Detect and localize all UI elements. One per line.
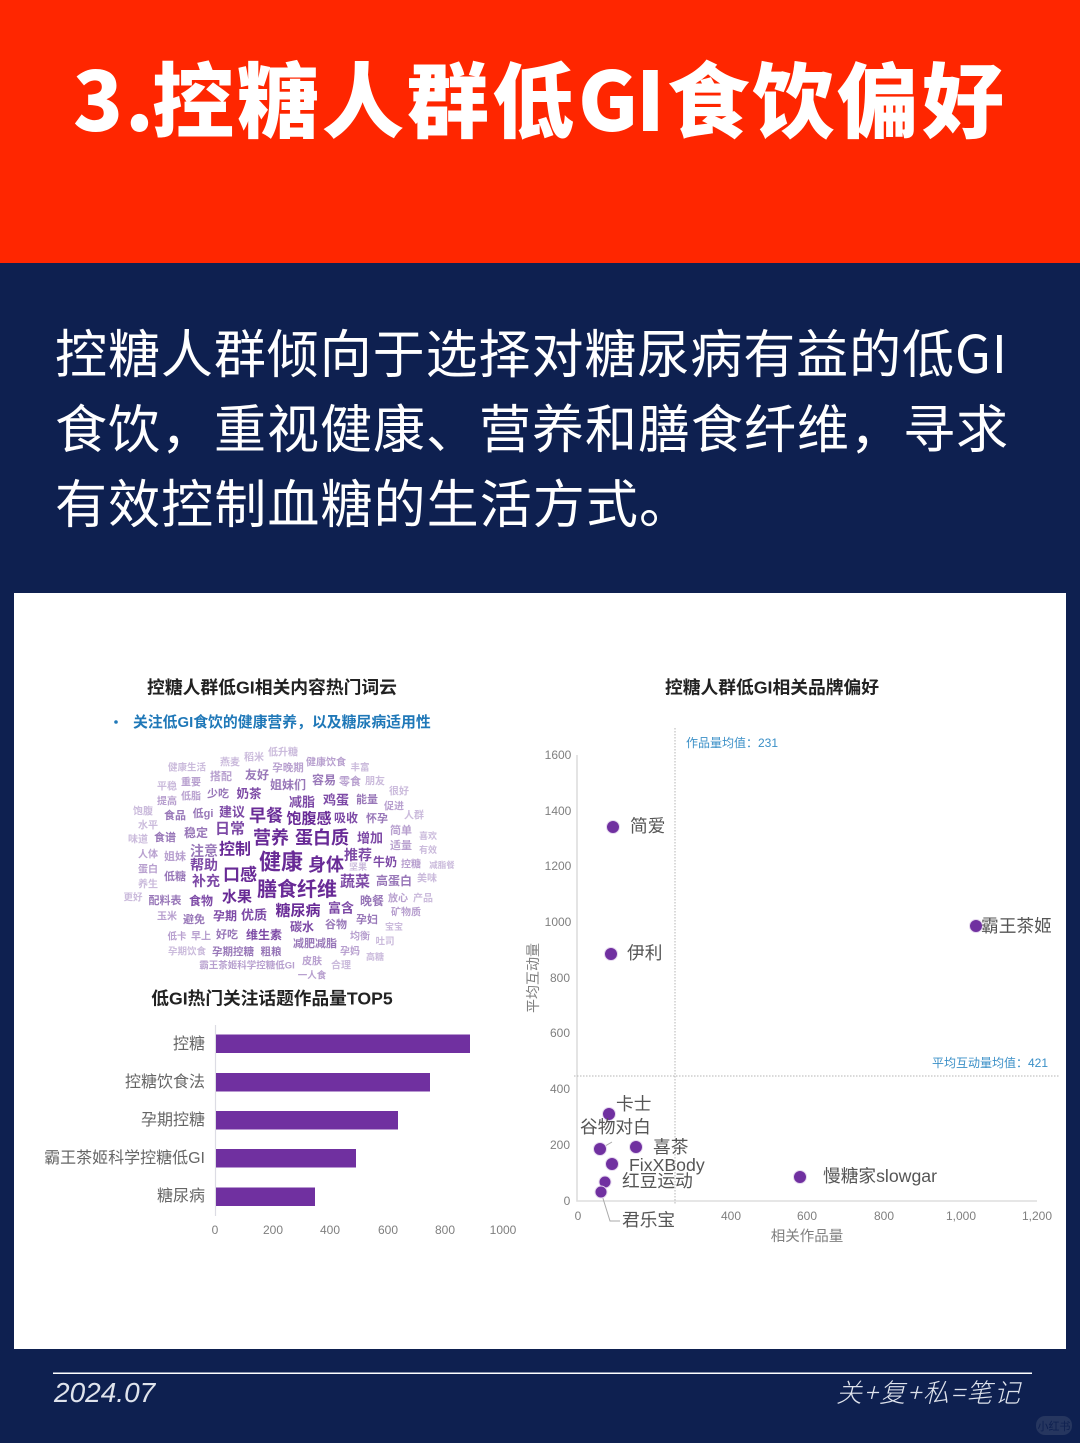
word cloud: 合理 [331, 958, 351, 972]
point labels: 君乐宝 [622, 1210, 675, 1230]
category labels: 控糖饮食法 [125, 1073, 205, 1091]
bars [216, 1034, 470, 1206]
category labels: 孕期控糖 [141, 1111, 205, 1129]
point labels: 喜茶 [653, 1137, 689, 1157]
heading: word cloud: 控糖人群低GI相关内容热门词云 [147, 676, 397, 698]
point labels: 简爱 [630, 816, 665, 836]
word cloud: 增加 [357, 830, 383, 846]
y axis labels [545, 748, 572, 1208]
word cloud: 控制 [219, 840, 251, 858]
word cloud: 提高 [157, 794, 177, 808]
word cloud: 推荐 [344, 847, 372, 863]
word cloud: 姐妹 [164, 849, 186, 863]
heading: scatter chart: 控糖人群低GI相关品牌偏好 [665, 676, 879, 698]
word cloud: 怀孕 [366, 811, 388, 825]
axis title: y: 平均互动量 [525, 943, 541, 1013]
word cloud: 食品 [164, 808, 186, 822]
intro text block [55, 313, 1008, 538]
title: 3.控糖人群低GI食饮偏好 [73, 36, 1004, 155]
bar chart [44, 1025, 517, 1237]
y axis labels: 1000 [545, 915, 572, 929]
word cloud: 日常 [215, 820, 245, 838]
word cloud: 配料表 [148, 893, 182, 907]
value axis: 0 [212, 1223, 219, 1237]
word cloud: 建议 [219, 804, 245, 820]
x axis labels: 400 [721, 1209, 741, 1223]
header band [0, 0, 1080, 263]
word cloud: 早餐 [249, 806, 283, 826]
word cloud: 喜欢 [419, 830, 437, 841]
point labels: FixXBody [629, 1155, 705, 1175]
word cloud: 低卡 [167, 930, 187, 942]
mean label: works: 作品量均值：231 [686, 735, 778, 750]
word cloud: 零食 [339, 774, 361, 788]
word cloud: 水果 [222, 888, 252, 906]
word cloud: 稻米 [244, 750, 264, 764]
word cloud: 霸王茶姬科学控糖低GI [199, 960, 295, 972]
word cloud: 促进 [384, 800, 404, 812]
word cloud: 营养 [253, 827, 289, 848]
word cloud: 放心 [388, 892, 408, 904]
data points [594, 820, 982, 1198]
word cloud: 有效 [419, 844, 437, 855]
word cloud: 避免 [183, 912, 205, 926]
word cloud: 燕麦 [220, 756, 240, 768]
word cloud: 朋友 [365, 774, 385, 788]
word cloud: 膳食纤维 [257, 877, 337, 901]
word cloud: 鸡蛋 [323, 792, 349, 808]
word cloud: 宝宝 [385, 921, 403, 932]
word cloud: 富含 [328, 900, 354, 916]
y axis labels: 1600 [545, 748, 572, 762]
word cloud: 减脂 [289, 794, 315, 810]
category labels: 霸王茶姬科学控糖低GI [44, 1149, 205, 1167]
axis title: x: 相关作品量 [771, 1228, 843, 1245]
mean label: engagement: 平均互动量均值：421 [932, 1055, 1048, 1070]
word cloud: 玉米 [157, 910, 177, 922]
word cloud: 孕晚期 [272, 761, 304, 774]
word cloud: 控糖 [401, 858, 421, 870]
y axis labels: 400 [550, 1082, 570, 1096]
axes [577, 755, 1037, 1201]
y axis labels: 800 [550, 971, 570, 985]
y axis labels: 0 [564, 1194, 571, 1208]
heading: bar chart: 低GI热门关注话题作品量TOP5 [151, 988, 393, 1008]
word cloud: 糖尿病 [275, 902, 321, 920]
word cloud: 蛋白质 [295, 827, 349, 848]
word cloud: 饱腹 [133, 804, 153, 818]
word cloud: 碳水 [290, 919, 314, 934]
point labels [580, 816, 1052, 1230]
point labels: 红豆运动 [622, 1171, 693, 1191]
word cloud [123, 746, 455, 982]
date: 2024.07 [53, 1377, 157, 1408]
word cloud: 姐妹们 [270, 777, 306, 792]
word cloud: 健康 [259, 850, 303, 874]
category labels: 控糖 [173, 1035, 205, 1053]
word cloud: 食谱 [154, 830, 176, 844]
call to action: 关+复+私=笔记 [836, 1373, 1022, 1410]
word cloud: 低糖 [164, 869, 186, 883]
word cloud: 蔬菜 [340, 874, 370, 890]
word cloud: 蛋白 [138, 862, 158, 876]
word cloud: 孕期饮食 [168, 946, 206, 958]
value axis: 1000 [490, 1223, 517, 1237]
word cloud: 产品 [413, 892, 433, 904]
y axis labels: 200 [550, 1138, 570, 1152]
word cloud: 早上 [191, 930, 211, 942]
category labels: 糖尿病 [157, 1187, 205, 1205]
word cloud: 健康饮食 [306, 756, 346, 768]
word cloud: 低升糖 [268, 746, 298, 758]
x axis labels: 800 [874, 1209, 894, 1223]
word cloud: 少吃 [207, 786, 229, 800]
word cloud: 容易 [312, 772, 336, 787]
x axis labels: 1,000 [946, 1209, 976, 1223]
word cloud: 更好 [123, 892, 143, 904]
word cloud: 吐司 [375, 936, 395, 948]
word cloud: 孕期控糖 [212, 945, 254, 958]
callout: word cloud insight: 关注低GI食饮的健康营养，以及糖尿病适用性 [133, 713, 431, 731]
x axis labels: 600 [797, 1209, 817, 1223]
point labels: 霸王茶姬 [981, 916, 1052, 936]
word cloud: 低gi [193, 806, 213, 820]
word cloud: 适量 [390, 839, 412, 852]
white chart panel [14, 593, 1066, 1349]
category labels [44, 1035, 205, 1205]
word cloud: 重要 [181, 776, 201, 788]
word cloud: 味道 [128, 832, 148, 846]
value axis: 200 [263, 1223, 283, 1237]
value axis: 400 [320, 1223, 340, 1237]
word cloud: 孕妇 [356, 912, 378, 926]
footer [53, 1372, 1032, 1410]
word cloud: 坚果 [349, 862, 367, 872]
word cloud: 好吃 [216, 927, 238, 941]
word cloud: 简单 [390, 823, 412, 837]
intro text block: 有效控制血糖的生活方式。 [55, 463, 691, 538]
word cloud: 高蛋白 [376, 873, 412, 888]
watermark: 小红书 [1038, 1420, 1070, 1433]
word cloud: 均衡 [350, 930, 370, 942]
word cloud: 水平 [138, 818, 158, 832]
word cloud: 奶茶 [236, 786, 262, 801]
y axis labels: 1400 [545, 804, 572, 818]
word cloud: 搭配 [210, 769, 232, 783]
word cloud: 晚餐 [360, 893, 384, 908]
word cloud: 谷物 [325, 917, 347, 931]
word cloud: 吸收 [334, 810, 358, 825]
word cloud: 牛奶 [373, 854, 397, 869]
word cloud: 皮肤 [302, 954, 322, 968]
word cloud: 注意 [190, 843, 218, 859]
word cloud: 能量 [356, 792, 378, 806]
word cloud: 孕期 [213, 909, 237, 923]
value axis: 800 [435, 1223, 455, 1237]
word cloud: 优质 [241, 908, 267, 922]
x axis labels: 0 [575, 1209, 582, 1223]
x axis labels [575, 1209, 1052, 1223]
scatter chart [525, 728, 1060, 1245]
word cloud: 粗粮 [260, 945, 282, 958]
word cloud: 健康生活 [168, 762, 206, 774]
word cloud: 很好 [389, 784, 409, 798]
word cloud: 维生素 [246, 927, 282, 942]
word cloud: 身体 [308, 855, 344, 875]
word cloud: 食物 [189, 893, 213, 908]
y axis labels: 600 [550, 1026, 570, 1040]
word cloud: 口感 [223, 864, 257, 884]
word cloud: 减脂餐 [429, 860, 455, 870]
word cloud: 矿物质 [391, 906, 421, 918]
word cloud: 美味 [417, 872, 437, 884]
point labels: 谷物对白 [580, 1117, 651, 1137]
intro text block: 食饮，重视健康、营养和膳食纤维，寻求 [55, 388, 1008, 463]
y axis labels: 1200 [545, 859, 572, 873]
word cloud: 平稳 [157, 780, 177, 792]
leader lines [600, 1142, 620, 1221]
point labels: 慢糖家slowgar [823, 1166, 937, 1186]
point labels: 伊利 [627, 943, 662, 963]
word cloud: 补充 [192, 873, 220, 889]
x axis labels: 1,200 [1022, 1209, 1052, 1223]
mean lines [574, 728, 1060, 1204]
point labels: 卡士 [616, 1094, 651, 1114]
intro text block: 控糖人群倾向于选择对糖尿病有益的低GI [55, 313, 1007, 388]
watermark [1036, 1416, 1072, 1435]
word cloud: 低脂 [181, 790, 201, 802]
word cloud: 一人食 [298, 970, 327, 982]
word cloud: 稳定 [184, 825, 208, 840]
word cloud: 孕妈 [340, 944, 360, 958]
value axis [212, 1223, 517, 1237]
word cloud: 友好 [245, 767, 269, 782]
word cloud: 高糖 [366, 951, 384, 962]
word cloud: 人群 [404, 808, 424, 822]
word cloud: 养生 [138, 878, 158, 890]
word cloud: 人体 [138, 848, 158, 860]
value axis: 600 [378, 1223, 398, 1237]
word cloud: 饱腹感 [286, 810, 332, 828]
word cloud: 丰富 [350, 762, 370, 774]
word cloud: 减肥减脂 [293, 937, 337, 950]
word cloud: 帮助 [190, 857, 218, 873]
